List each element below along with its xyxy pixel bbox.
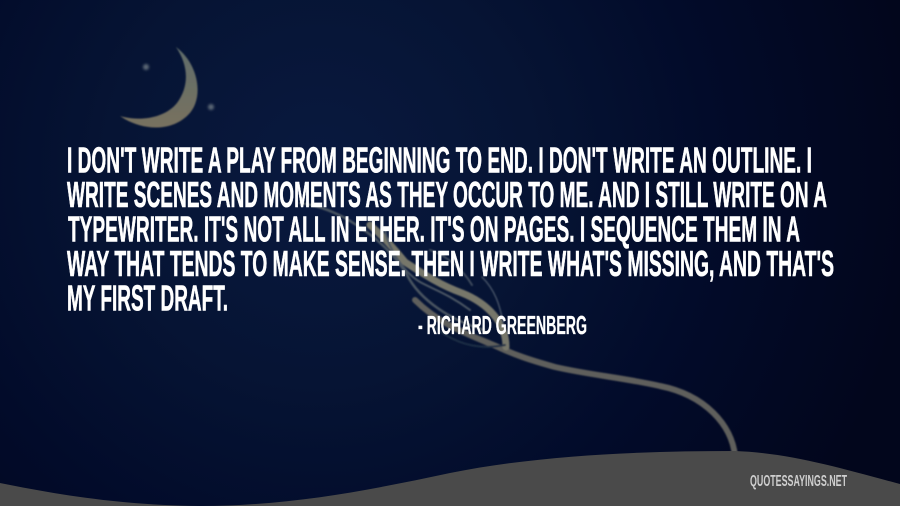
tree silhouette <box>300 203 735 456</box>
quote text: MY FIRST DRAFT. <box>67 278 228 319</box>
author attribution: - RICHARD GREENBERG <box>418 310 587 340</box>
ground <box>0 451 900 506</box>
tree branches <box>300 203 506 347</box>
icon: crescent moon <box>120 47 198 128</box>
quote text <box>67 140 834 319</box>
icon: stars <box>143 64 214 110</box>
tree trunk <box>415 300 735 456</box>
